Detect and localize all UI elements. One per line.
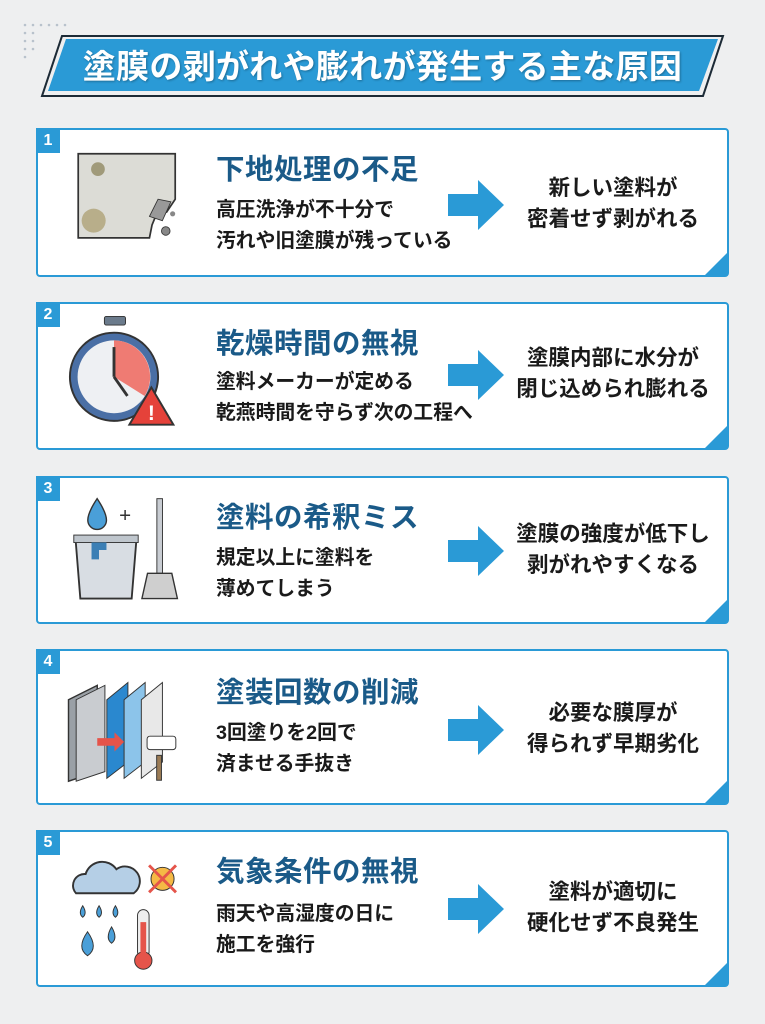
body text: 施工を強行: [216, 934, 315, 956]
body text: 規定以上に塗料を: [216, 547, 374, 569]
heading: 気象条件の無視: [216, 856, 419, 888]
arrow: [448, 350, 504, 400]
result: 必要な膜厚が: [548, 701, 678, 725]
heading: 塗装回数の削減: [216, 677, 419, 709]
result: 閉じ込められ膨れる: [516, 377, 710, 401]
body text: [216, 546, 374, 600]
panel 1: [36, 128, 729, 277]
icon: water, bucket and broom: [73, 498, 178, 600]
body text: 塗料メーカーが定める: [216, 371, 414, 393]
panel 5: 5: [44, 834, 52, 851]
icon: stopwatch with warning: !: [148, 402, 155, 425]
result: [516, 346, 710, 401]
icon: rain, sun crossed, thermometer: [72, 860, 177, 970]
panel 4: 4: [44, 653, 52, 670]
icon: water, bucket and broom: +: [119, 504, 131, 527]
panel 3: 3: [44, 480, 52, 497]
result: 新しい塗料が: [548, 176, 678, 200]
body text: 雨天や高湿度の日に: [216, 903, 394, 925]
icon: peeling wall: [77, 152, 176, 239]
result: 得られず早期劣化: [527, 732, 699, 756]
body text: [216, 370, 473, 424]
panel 1: 1: [44, 132, 52, 149]
heading: 乾燥時間の無視: [216, 328, 419, 360]
arrow: [448, 526, 504, 576]
title banner: [40, 35, 724, 97]
result: [527, 176, 699, 231]
result: 塗膜内部に水分が: [527, 346, 699, 370]
result: 剥がれやすくなる: [527, 553, 699, 577]
arrow: [448, 884, 504, 934]
body text: 乾燕時間を守らず次の工程へ: [216, 402, 473, 424]
body text: [216, 198, 452, 252]
body text: [216, 722, 357, 775]
body text: 3回塗りを2回で: [216, 722, 357, 744]
result: 塗料が適切に: [548, 880, 678, 904]
result: 硬化せず不良発生: [527, 911, 699, 935]
panel 5: [36, 830, 729, 987]
title banner: 塗膜の剥がれや膨れが発生する主な原因: [83, 48, 682, 85]
body text: 薄めてしまう: [216, 578, 335, 600]
panel 3: [36, 476, 729, 624]
icon: stopwatch with warning: [68, 316, 175, 426]
heading: 塗料の希釈ミス: [216, 502, 419, 534]
arrow: [448, 180, 504, 230]
decorative dots: [24, 24, 66, 58]
body text: 済ませる手抜き: [216, 753, 354, 775]
result: [527, 880, 699, 935]
panel 4: [36, 649, 729, 805]
result: 密着せず剥がれる: [527, 207, 699, 231]
heading: 下地処理の不足: [216, 154, 419, 186]
body text: 高圧洗浄が不十分で: [216, 199, 394, 221]
panel 2: [36, 302, 729, 450]
result: 塗膜の強度が低下し: [516, 522, 710, 546]
result: [516, 522, 710, 577]
icon: paint layers: [68, 682, 176, 782]
body text: 汚れや旧塗膜が残っている: [216, 230, 452, 252]
result: [527, 701, 699, 756]
arrow: [448, 705, 504, 755]
body text: [216, 902, 394, 956]
panel 2: 2: [44, 306, 52, 323]
